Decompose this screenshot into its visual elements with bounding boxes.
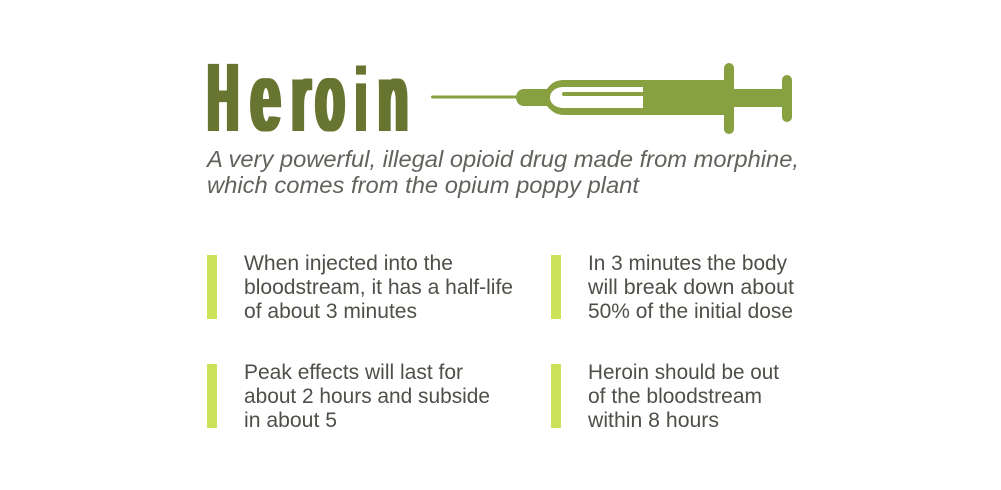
fact: breakdown: 50% of the initial dose [588, 300, 793, 323]
subtitle: A very powerful, illegal opioid drug made from morphine, [205, 146, 799, 172]
title: H [208, 43, 238, 152]
fact: breakdown: In 3 minutes the body [588, 252, 787, 275]
fact: breakdown [551, 252, 794, 323]
subtitle: which comes from the opium poppy plant [207, 172, 640, 198]
title [208, 42, 408, 152]
subtitle [205, 146, 799, 198]
title: r [292, 43, 310, 152]
fact: peak effects: Peak effects will last for [244, 361, 463, 384]
fact: out of bloodstream: of the bloodstream [588, 385, 762, 408]
fact: half-life: When injected into the [244, 252, 453, 275]
fact: peak effects: about 2 hours and subside [244, 385, 490, 408]
title: i [356, 51, 366, 151]
fact: out of bloodstream [551, 361, 779, 432]
fact: peak effects: in about 5 [244, 409, 337, 432]
fact: half-life: of about 3 minutes [244, 300, 417, 323]
icon: syringe [431, 63, 792, 134]
title: n [378, 43, 408, 152]
fact: peak effects [207, 361, 490, 432]
fact: breakdown: will break down about [587, 276, 794, 299]
fact: out of bloodstream: within 8 hours [587, 409, 719, 432]
fact: half-life [207, 252, 513, 323]
title: o [316, 42, 344, 152]
title: e [250, 42, 280, 152]
fact: out of bloodstream: Heroin should be out [588, 361, 779, 384]
fact: half-life: bloodstream, it has a half-life [244, 276, 513, 299]
